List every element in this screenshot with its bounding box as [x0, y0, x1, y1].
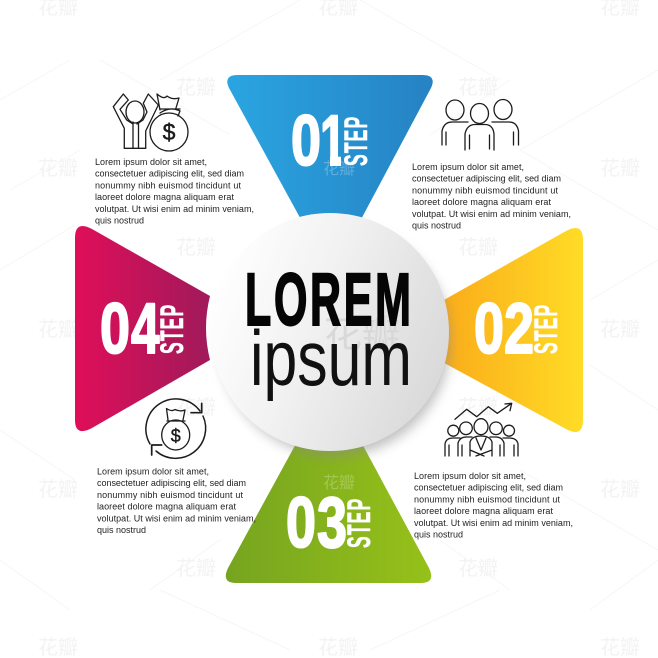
heading LOREM: LOREM: [245, 258, 414, 341]
watermark logos: 花瓣: [458, 557, 498, 580]
watermark logos: 花瓣: [600, 157, 640, 180]
watermark logos: 花瓣: [176, 76, 216, 99]
icon: man with money bag: [113, 94, 188, 151]
watermark logos: 花瓣: [38, 478, 78, 501]
text block: step 01 top-right: Lorem ipsum dolor sit amet,: [412, 162, 524, 172]
icon: three people: [442, 100, 518, 150]
text block: step 01 top-right: laoreet dolore magna aliquam erat: [412, 197, 551, 207]
panel: step 03 green triangle: 花瓣: [323, 474, 355, 492]
number 03: [286, 484, 347, 563]
text block: step 04 top-left: laoreet dolore magna aliquam erat: [95, 192, 234, 202]
number 03: 0: [286, 484, 316, 563]
number 01: 1: [320, 101, 346, 180]
label STEP: STEP: [530, 304, 564, 354]
panel: step 01 blue triangle: [227, 75, 433, 225]
text block: step 01 top-right: nonummy nibh euismod tincidunt ut: [412, 185, 558, 195]
watermark logos: 花瓣: [38, 157, 78, 180]
number 02: 0: [474, 290, 504, 369]
text block: step 02 bottom-right: volutpat. Ut wisi enim ad minim veniam,: [414, 518, 573, 528]
watermark logos: 花瓣: [600, 318, 640, 341]
text block: step 04 top-left: quis nostrud: [95, 216, 144, 226]
watermark logos: 花瓣: [458, 396, 498, 419]
panel: step 02 yellow triangle: [435, 228, 583, 432]
text block: step 01 top-right: volutpat. Ut wisi enim ad minim veniam,: [412, 209, 571, 219]
text block: step 03 bottom-left: Lorem ipsum dolor sit amet,: [97, 466, 209, 476]
text block: step 04 top-left: nonummy nibh euismod tincidunt ut: [95, 180, 241, 190]
text block: step 04 top-left: Lorem ipsum dolor sit amet,: [95, 157, 207, 167]
text block: step 02 bottom-right: quis nostrud: [414, 530, 463, 540]
number 01: [292, 114, 341, 166]
number 03: 3: [317, 484, 347, 563]
watermark logos: 花瓣: [38, 318, 78, 341]
label STEP: STEP: [343, 498, 377, 548]
text block: step 03 bottom-left: laoreet dolore magna aliquam erat: [97, 502, 236, 512]
label STEP: STEP: [156, 304, 190, 354]
text block: step 01 top-right: quis nostrud: [412, 220, 461, 230]
watermark logos: 花瓣: [176, 557, 216, 580]
watermark logos: 花瓣: [176, 236, 216, 259]
number 04: [100, 290, 160, 369]
icon: team with rising arrow: [445, 403, 518, 456]
panel: step 03 green triangle: [226, 440, 431, 583]
text block: step 02 bottom-right: laoreet dolore magna aliquam erat: [414, 506, 553, 516]
text block: step 04 top-left: volutpat. Ut wisi enim ad minim veniam,: [95, 204, 254, 214]
centre circle: [211, 213, 450, 456]
text block: step 04 top-left: consectetuer adipiscing elit, sed diam: [95, 169, 244, 179]
watermark logos: 花瓣: [458, 236, 498, 259]
text block: step 03 bottom-left: nonummy nibh euismod tincidunt ut: [97, 490, 243, 500]
icon: money bag with cycle arrows: [146, 399, 206, 458]
text block: step 03 bottom-left: quis nostrud: [97, 525, 146, 535]
text block: step 03 bottom-left: consectetuer adipiscing elit, sed diam: [97, 478, 246, 488]
watermark logos: 花瓣: [176, 396, 216, 419]
centre circle: 花瓣: [324, 314, 400, 356]
label STEP: STEP: [340, 116, 374, 166]
text block: step 02 bottom-right: Lorem ipsum dolor sit amet,: [414, 471, 526, 481]
number 01: 0: [291, 102, 321, 181]
text block: step 03 bottom-left: volutpat. Ut wisi enim ad minim veniam,: [97, 513, 256, 523]
watermark logos: 花瓣: [600, 478, 640, 501]
number 02: [474, 290, 534, 369]
icon: man with money bag: $: [163, 119, 176, 145]
panel: step 04 crimson triangle: [75, 226, 210, 431]
number 02: 2: [504, 290, 534, 369]
number 04: 0: [100, 290, 130, 369]
text block: step 02 bottom-right: consectetuer adipiscing elit, sed diam: [414, 483, 563, 493]
icon: money bag with cycle arrows: $: [171, 426, 181, 446]
number 04: 4: [131, 290, 160, 369]
watermark logos: 花瓣: [458, 76, 498, 99]
text block: step 02 bottom-right: nonummy nibh euismod tincidunt ut: [414, 494, 560, 504]
heading ipsum: ipsum: [250, 314, 412, 402]
panel: step 01 blue triangle: 花瓣: [323, 160, 355, 178]
text block: step 01 top-right: consectetuer adipiscing elit, sed diam: [412, 174, 561, 184]
